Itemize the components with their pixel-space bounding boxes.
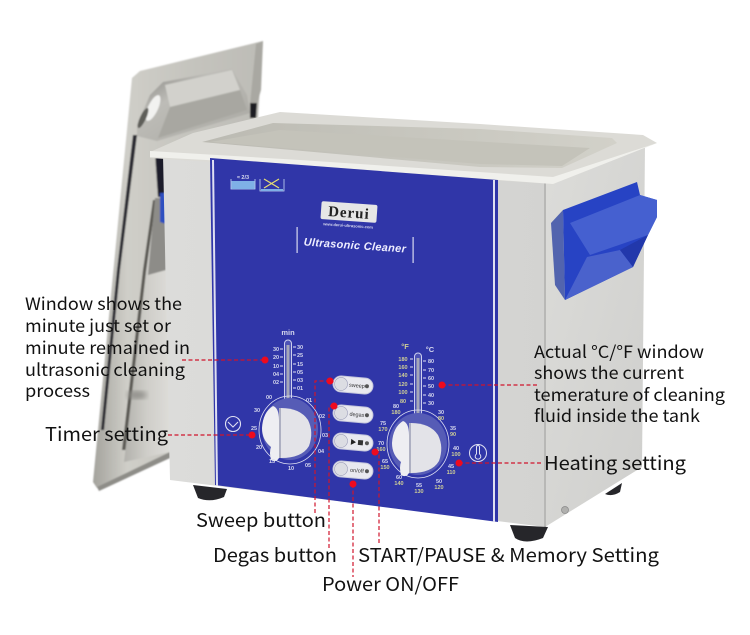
timer dial: 30 xyxy=(254,408,260,414)
temperature gauge: 60 xyxy=(428,376,434,382)
timer gauge: 20 xyxy=(273,355,279,361)
callout leaders xyxy=(168,356,543,577)
timer gauge: 02 xyxy=(273,380,279,386)
lid handle xyxy=(136,69,250,141)
lid xyxy=(93,41,263,491)
temperature gauge xyxy=(398,342,435,425)
callout: temperature window: shows the current xyxy=(534,359,685,384)
icon: clock xyxy=(226,416,240,432)
callout: minute window: ultrasonic cleaning xyxy=(25,356,185,381)
temperature gauge: 80 xyxy=(400,399,406,405)
temperature gauge: 140 xyxy=(398,373,408,379)
timer gauge: min xyxy=(281,328,295,337)
timer gauge: 15 xyxy=(297,362,303,368)
rim xyxy=(150,112,657,184)
callout: minute window: minute just set or xyxy=(25,312,171,337)
timer gauge: 01 xyxy=(297,386,303,392)
start pause button xyxy=(332,432,374,452)
blue control panel xyxy=(210,158,498,522)
blue side handle xyxy=(551,182,657,300)
temperature gauge: 80 xyxy=(428,359,434,365)
product name xyxy=(296,227,414,263)
temperature gauge: 70 xyxy=(428,368,434,374)
timer gauge: 30 xyxy=(297,345,303,351)
buttons xyxy=(332,375,374,480)
heating dial: 50 xyxy=(436,479,442,485)
heating dial: 150 xyxy=(380,465,390,471)
heating dial: 120 xyxy=(434,485,444,491)
callout: minute window xyxy=(25,290,190,402)
heating dial: 40 xyxy=(453,446,459,452)
heating dial: 130 xyxy=(414,489,424,495)
heating dial: 170 xyxy=(378,427,388,433)
temperature gauge: 120 xyxy=(398,382,408,388)
timer dial xyxy=(251,395,328,472)
heating dial: 35 xyxy=(450,426,456,432)
callout: minute window: minute remained in xyxy=(25,334,190,359)
heating dial: 100 xyxy=(451,452,461,458)
temperature gauge: 30 xyxy=(428,401,434,407)
brand logo: www.derui-ultrasonic.com xyxy=(322,221,374,230)
feet xyxy=(193,483,622,542)
timer dial: 05 xyxy=(305,463,311,469)
timer dial: 10 xyxy=(288,466,294,472)
temperature gauge: 180 xyxy=(398,357,408,363)
heating dial: 30 xyxy=(438,410,444,416)
heating dial: 75 xyxy=(380,421,386,427)
temperature gauge: 100 xyxy=(398,390,408,396)
timer gauge: 30 xyxy=(273,347,279,353)
heating dial: 55 xyxy=(416,483,422,489)
callout: minute window: Window shows the xyxy=(25,290,182,315)
callout: temperature window: Actual °C/°F window xyxy=(534,338,704,363)
timer gauge xyxy=(273,328,303,412)
heating dial: 70 xyxy=(378,441,384,447)
callout: minute window: process xyxy=(25,377,90,402)
timer dial: 03 xyxy=(322,433,328,439)
callout: temperature window: fluid inside the tank xyxy=(534,402,701,427)
heating dial xyxy=(376,404,461,495)
icon: thermometer xyxy=(470,444,486,462)
ultrasonic tank body xyxy=(150,112,657,527)
heating dial: 60 xyxy=(396,475,402,481)
timer dial: 15 xyxy=(269,459,275,465)
brand logo: Derui xyxy=(328,204,370,223)
tank opening xyxy=(202,123,617,168)
timer dial: 04 xyxy=(318,449,325,455)
callout: temperature window: temerature of cleaning xyxy=(534,381,725,406)
heating dial: 45 xyxy=(448,464,454,470)
timer dial: 20 xyxy=(256,445,262,451)
callout: timer setting: Timer setting xyxy=(45,420,168,447)
callout: start pause memory: START/PAUSE & Memory Setting xyxy=(358,541,659,568)
callout: temperature window xyxy=(534,338,725,427)
callout: sweep button: Sweep button xyxy=(196,506,326,533)
callout: heating setting: Heating setting xyxy=(544,449,686,476)
sweep button: sweep xyxy=(349,383,365,390)
timer gauge: 25 xyxy=(297,353,303,359)
timer dial: 02 xyxy=(319,414,325,420)
heating dial: 160 xyxy=(376,447,386,453)
degas button: degas xyxy=(349,412,365,419)
front wall xyxy=(163,155,545,527)
heating dial: 65 xyxy=(382,459,388,465)
callout: power: Power ON/OFF xyxy=(322,570,459,597)
temperature gauge: 50 xyxy=(428,384,434,390)
heating dial: 140 xyxy=(394,481,404,487)
power button: on/off xyxy=(350,468,364,475)
screw xyxy=(562,506,568,514)
heating dial: 180 xyxy=(391,410,401,416)
timer dial: 00 xyxy=(266,395,272,401)
timer gauge: 03 xyxy=(297,378,303,384)
icon: fill level 2/3: ≈ 2/3 xyxy=(237,175,249,181)
heating dial: 110 xyxy=(447,470,455,476)
heating dial: 80 xyxy=(438,416,444,422)
brand logo xyxy=(320,201,378,230)
temperature gauge: 160 xyxy=(398,365,408,371)
temperature gauge: °F xyxy=(401,342,409,351)
temperature gauge: 40 xyxy=(428,393,434,399)
timer gauge: 04 xyxy=(273,372,280,378)
heating dial: 90 xyxy=(450,432,456,438)
side wall xyxy=(545,145,645,527)
timer gauge: 05 xyxy=(297,370,303,376)
heating dial: 80 xyxy=(393,404,399,410)
icon: fill level 2/3 xyxy=(231,175,255,189)
product name: Ultrasonic Cleaner xyxy=(303,236,407,256)
timer dial: 01 xyxy=(306,398,312,404)
temperature gauge: °C xyxy=(426,345,435,354)
timer gauge: 10 xyxy=(273,364,279,370)
icon: no dry run xyxy=(260,179,284,191)
callout: degas button: Degas button xyxy=(213,541,337,568)
timer dial: 25 xyxy=(251,426,257,432)
